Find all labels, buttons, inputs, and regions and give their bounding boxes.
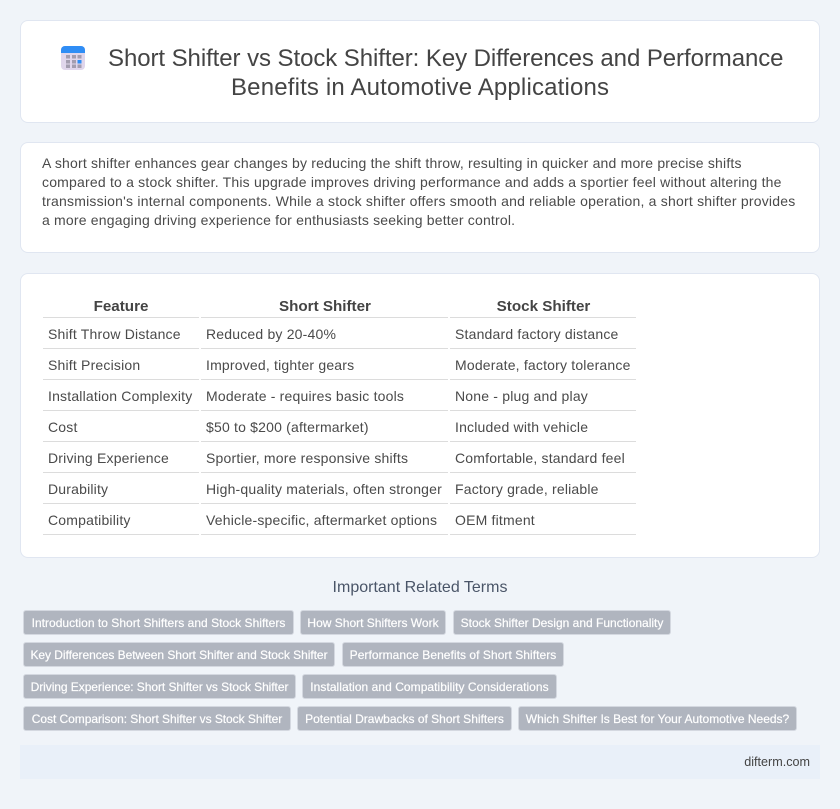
row: cost: $50 to $200 (aftermarket): [206, 419, 369, 435]
row: shift precision: Improved, tighter gears: [206, 357, 354, 373]
icon: calendar: [61, 46, 85, 70]
title: Benefits in Automotive Applications: [231, 74, 609, 101]
comparison table: [43, 298, 636, 535]
related terms tags: Key Differences Between Short Shifter and Stock Shifter: [30, 648, 328, 662]
related terms tags: Installation and Compatibility Considerations: [310, 680, 549, 694]
row: durability: Factory grade, reliable: [455, 481, 599, 497]
row: compatibility: OEM fitment: [455, 512, 535, 528]
intro text: A short shifter enhances gear changes by reducing the shift throw, resulting in quicker and more precise shifts: [42, 155, 742, 171]
footer source: difterm.com: [744, 755, 810, 769]
row: cost: [48, 419, 588, 435]
row: shift throw distance: Standard factory distance: [455, 326, 619, 342]
related terms heading: Important Related Terms: [333, 579, 507, 596]
row: driving experience: Sportier, more responsive shifts: [206, 450, 408, 466]
table header: [94, 298, 590, 315]
row: durability: Durability: [48, 481, 108, 497]
table header: Stock Shifter: [497, 298, 590, 315]
intro paragraph card: [20, 142, 820, 253]
row: driving experience: Comfortable, standard feel: [455, 450, 625, 466]
related terms tags: Cost Comparison: Short Shifter vs Stock Shifter: [32, 712, 282, 726]
row: cost: Included with vehicle: [455, 419, 588, 435]
title: Short Shifter vs Stock Shifter: Key Differences and Performance: [108, 45, 783, 72]
row: shift precision: Shift Precision: [48, 357, 140, 373]
title: [108, 45, 783, 101]
row: cost: Cost: [48, 419, 78, 435]
row: compatibility: Compatibility: [48, 512, 131, 528]
table header: Feature: [94, 298, 148, 315]
intro text: [42, 155, 795, 228]
row: shift throw distance: Shift Throw Distance: [48, 326, 181, 342]
comparison table card: [20, 273, 820, 558]
row: compatibility: Vehicle-specific, aftermarket options: [206, 512, 437, 528]
related terms tags: Stock Shifter Design and Functionality: [461, 616, 663, 630]
row: installation complexity: Moderate - requires basic tools: [206, 388, 404, 404]
row: shift precision: [48, 357, 631, 373]
intro text: transmission's internal components. While a stock shifter offers smooth and reliable operation, a short shifter provides: [42, 193, 795, 209]
row: compatibility: [48, 512, 535, 528]
row: installation complexity: None - plug and play: [455, 388, 588, 404]
intro text: compared to a stock shifter. This upgrade improves driving performance and adds a sportier feel without altering the: [42, 174, 782, 190]
row: durability: [48, 481, 599, 497]
related terms tags: Potential Drawbacks of Short Shifters: [305, 712, 504, 726]
row: driving experience: [48, 450, 625, 466]
row: shift throw distance: Reduced by 20-40%: [206, 326, 336, 342]
footer bar: [20, 745, 820, 779]
related terms tags: [23, 610, 797, 731]
row: shift precision: Moderate, factory tolerance: [455, 357, 631, 373]
related terms tags: Driving Experience: Short Shifter vs Stock Shifter: [31, 680, 288, 694]
row: durability: High-quality materials, often stronger: [206, 481, 442, 497]
related terms tags: Which Shifter Is Best for Your Automotive Needs?: [526, 712, 789, 726]
related terms tags: How Short Shifters Work: [307, 616, 439, 630]
intro text: a more engaging driving experience for enthusiasts seeking better control.: [42, 212, 515, 228]
header card: [20, 20, 820, 123]
row: installation complexity: [48, 388, 588, 404]
row: installation complexity: Installation Complexity: [48, 388, 192, 404]
row: shift throw distance: [48, 326, 619, 342]
related terms tags: Introduction to Short Shifters and Stock Shifters: [32, 616, 285, 630]
table header: Short Shifter: [279, 298, 371, 315]
row: driving experience: Driving Experience: [48, 450, 169, 466]
related terms tags: Performance Benefits of Short Shifters: [350, 648, 556, 662]
